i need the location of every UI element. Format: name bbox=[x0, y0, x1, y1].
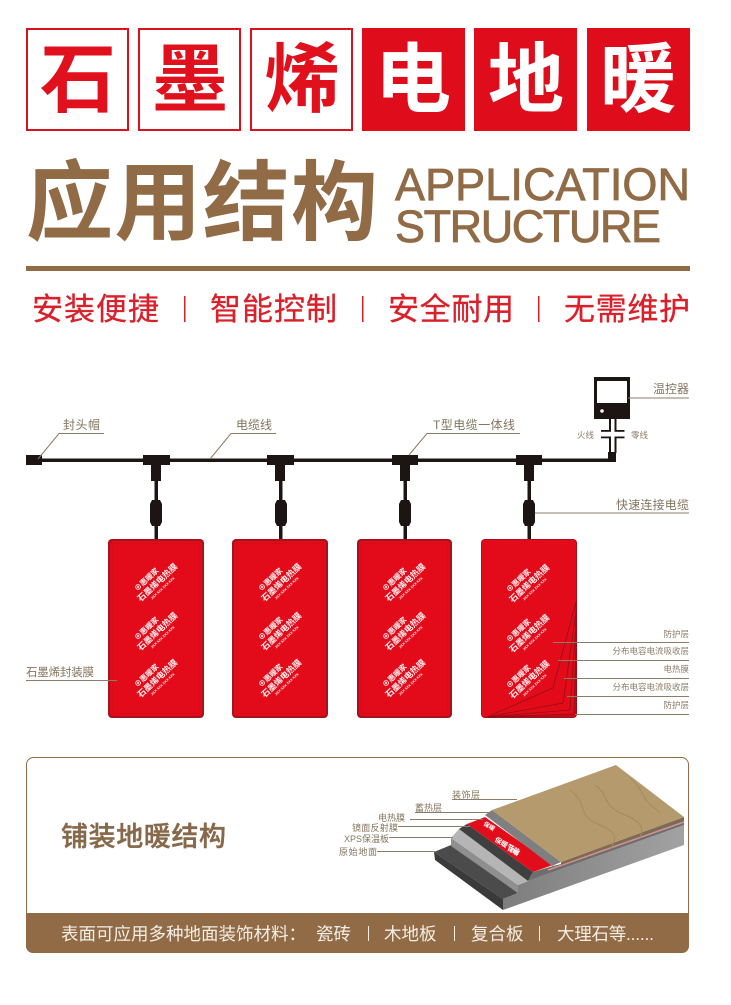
card 3: graphene film: 石墨烯电热膜 bbox=[383, 610, 428, 653]
card 3: graphene film: XXX XXX XXX XXX bbox=[398, 576, 424, 600]
card 1: graphene film: 石墨烯电热膜 bbox=[135, 561, 180, 604]
layer labels for folded film: 分布电容电流吸收层 bbox=[612, 646, 689, 656]
card 3: graphene film: 石墨烯电热膜 bbox=[383, 657, 428, 700]
card 4: film with folded layers: ⊕惠暖家 bbox=[504, 566, 533, 594]
card 1: graphene film bbox=[108, 539, 204, 718]
label: thermostat bbox=[628, 382, 689, 398]
card 3: graphene film: ⊕惠暖家 bbox=[380, 565, 409, 593]
surface materials caption: 复合板 bbox=[471, 924, 524, 944]
floor layers illustration: 保暖 bbox=[506, 845, 520, 858]
floor layers illustration: 保暖节能 bbox=[493, 835, 522, 857]
label: quick connect cable: 快速连接电缆 bbox=[616, 497, 689, 512]
floor layer labels: XPS保温板 bbox=[344, 833, 389, 844]
slogans row bbox=[32, 292, 690, 327]
floor layer labels bbox=[339, 789, 517, 857]
card 2: graphene film bbox=[232, 539, 328, 718]
wiring diagram: main cable and connectors bbox=[26, 455, 612, 539]
card 4: film with folded layers: XXX XXX XXX XXX bbox=[522, 673, 548, 697]
card 3: graphene film: XXX XXX XXX XXX bbox=[398, 672, 424, 696]
card 1: graphene film: XXX XXX XXX XXX bbox=[150, 576, 176, 600]
header: six title character tiles: 石 bbox=[40, 38, 116, 123]
card 3: graphene film: ⊕惠暖家 bbox=[380, 661, 409, 689]
card 2: graphene film: ⊕惠暖家 bbox=[256, 614, 285, 642]
slogans row: 安装便捷 bbox=[32, 292, 159, 327]
floor layer labels: 蓄热层 bbox=[415, 802, 442, 813]
surface materials caption: 木地板 bbox=[384, 924, 436, 944]
label: encapsulation film bbox=[26, 665, 117, 680]
header: six title character tiles: 暖 bbox=[600, 38, 676, 123]
card 1: graphene film: XXX XXX XXX XXX bbox=[150, 625, 176, 649]
card 2: graphene film: ⊕惠暖家 bbox=[256, 565, 285, 593]
slogans row: 智能控制 bbox=[210, 292, 337, 327]
label: end cap: 封头帽 bbox=[63, 417, 100, 432]
label: end cap bbox=[38, 417, 104, 459]
label: T cable bbox=[409, 418, 520, 455]
floor layer labels: 原始地面 bbox=[339, 846, 377, 857]
panel heading: 铺装地暖结构 bbox=[61, 822, 226, 852]
card 3: graphene film: XXX XXX XXX XXX bbox=[398, 625, 424, 649]
card 2: graphene film: 石墨烯电热膜 bbox=[259, 610, 304, 653]
card 3: graphene film bbox=[357, 539, 452, 718]
slogans row: 安全耐用 bbox=[388, 292, 514, 327]
card 1: graphene film: ⊕惠暖家 bbox=[132, 661, 161, 689]
card 1: graphene film: ⊕惠暖家 bbox=[132, 565, 161, 593]
header: six title character tiles: 烯 bbox=[264, 38, 340, 123]
heading divider bar bbox=[26, 266, 690, 271]
card 1: graphene film: 石墨烯电热膜 bbox=[135, 610, 180, 653]
card 2: graphene film: XXX XXX XXX XXX bbox=[274, 625, 300, 649]
card 4: film with folded layers: XXX XXX XXX XXX bbox=[522, 577, 548, 601]
layer labels for folded film: 电热膜 bbox=[663, 664, 689, 674]
surface materials caption: 瓷砖 bbox=[316, 924, 351, 944]
layer labels for folded film: 分布电容电流吸收层 bbox=[612, 682, 689, 692]
panel: floor heating structure bbox=[26, 758, 689, 953]
floor layer labels: 装饰层 bbox=[452, 789, 480, 800]
label: T cable: T型电缆一体线 bbox=[433, 418, 515, 432]
slogans row: 无需维护 bbox=[564, 292, 690, 327]
card 3: graphene film: 石墨烯电热膜 bbox=[383, 561, 428, 604]
card 2: graphene film: 石墨烯电热膜 bbox=[259, 657, 304, 700]
card 4: film with folded layers: 石墨烯电热膜 bbox=[507, 658, 552, 701]
header: six title character tiles: 墨 bbox=[152, 38, 228, 123]
floor layers illustration bbox=[434, 765, 684, 910]
card 4: film with folded layers: ⊕惠暖家 bbox=[504, 662, 533, 690]
card 4: film with folded layers bbox=[481, 539, 577, 718]
card 2: graphene film: 石墨烯电热膜 bbox=[259, 561, 304, 604]
card 2: graphene film: ⊕惠暖家 bbox=[256, 661, 285, 689]
card 1: graphene film: ⊕惠暖家 bbox=[132, 614, 161, 642]
header: six title character tiles bbox=[27, 28, 690, 131]
card 4: film with folded layers: XXX XXX XXX XXX bbox=[522, 627, 548, 651]
header: six title character tiles: 地 bbox=[488, 38, 564, 123]
heading: application structure: APPLICATION bbox=[395, 159, 690, 210]
header: six title character tiles: 电 bbox=[375, 38, 451, 123]
surface materials caption bbox=[61, 924, 654, 944]
heading: application structure: STRUCTURE bbox=[395, 201, 661, 252]
floor layer labels: 电热膜 bbox=[378, 812, 405, 823]
floor layers illustration: 保暖 bbox=[482, 820, 496, 833]
card 2: graphene film: XXX XXX XXX XXX bbox=[274, 672, 300, 696]
label: cable bbox=[210, 418, 276, 459]
card 4: film with folded layers: ⊕惠暖家 bbox=[504, 616, 533, 644]
thermostat with live and neutral wires: 零线 bbox=[631, 430, 648, 440]
surface materials caption: 大理石等...... bbox=[557, 924, 654, 944]
floor layer labels: 镜面反射膜 bbox=[352, 822, 398, 833]
card 3: graphene film: ⊕惠暖家 bbox=[380, 614, 409, 642]
card 2: graphene film: XXX XXX XXX XXX bbox=[274, 576, 300, 600]
layer labels for folded film: 防护层 bbox=[663, 700, 689, 710]
card 1: graphene film: XXX XXX XXX XXX bbox=[150, 672, 176, 696]
thermostat with live and neutral wires: 火线 bbox=[577, 430, 594, 440]
card 4: film with folded layers: 石墨烯电热膜 bbox=[507, 612, 552, 655]
card 4: film with folded layers: 石墨烯电热膜 bbox=[507, 562, 552, 605]
surface materials caption: 表面可应用多种地面装饰材料： bbox=[61, 924, 306, 944]
heading: application structure: 应用结构 bbox=[26, 155, 378, 252]
heading: application structure bbox=[26, 155, 690, 252]
layer labels for folded film bbox=[553, 629, 689, 714]
label: thermostat: 温控器 bbox=[653, 382, 689, 396]
card 1: graphene film: 石墨烯电热膜 bbox=[135, 657, 180, 700]
thermostat with live and neutral wires bbox=[577, 377, 648, 462]
label: encapsulation film: 石墨烯封装膜 bbox=[26, 665, 94, 679]
label: cable: 电缆线 bbox=[236, 418, 272, 432]
layer labels for folded film: 防护层 bbox=[663, 629, 689, 639]
